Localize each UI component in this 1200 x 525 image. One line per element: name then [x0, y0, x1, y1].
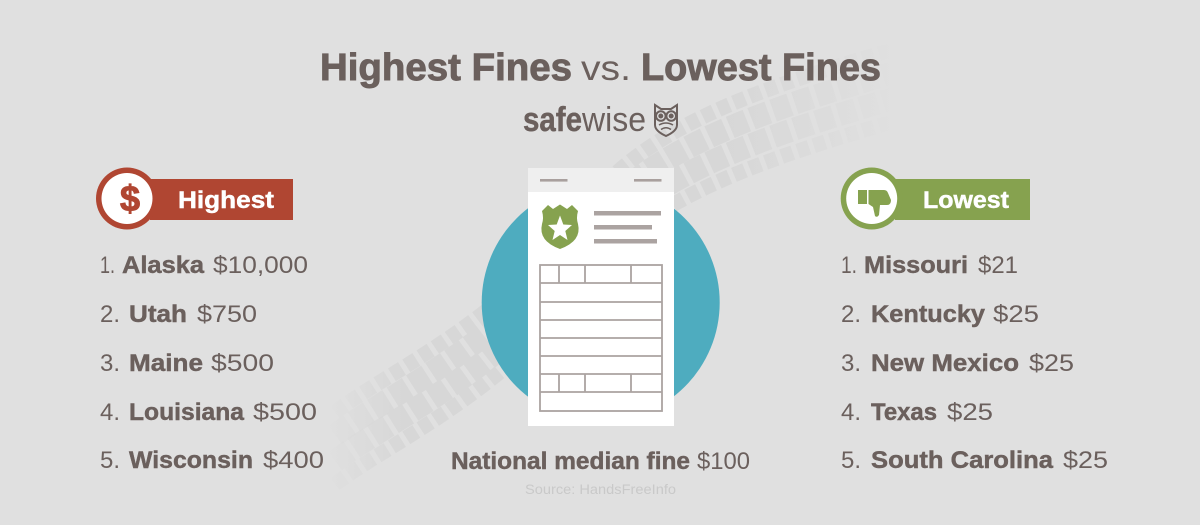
national median fine: National median fine — [451, 448, 690, 475]
list: highest fines: 2. — [100, 301, 120, 328]
source: Source: HandsFreeInfo — [525, 482, 676, 497]
ticket paper — [528, 168, 674, 426]
list: lowest fines: Texas — [871, 399, 937, 426]
list: highest fines: $10,000 — [213, 252, 308, 279]
panel: highest — [96, 168, 324, 474]
list: highest fines: 5. — [100, 447, 120, 474]
national median fine: $100 — [697, 448, 750, 475]
list: highest fines: 3. — [100, 350, 120, 377]
panel: lowest — [841, 168, 1108, 474]
illustration: citation ticket — [482, 168, 720, 426]
list: highest fines — [100, 252, 324, 474]
list: highest fines: Utah — [129, 301, 187, 328]
safewise logo: wise — [581, 101, 646, 139]
list: highest fines: Louisiana — [129, 399, 245, 426]
list: lowest fines: $25 — [1029, 350, 1074, 377]
title: Highest Fines — [320, 47, 572, 89]
badge: lowest: Lowest — [923, 187, 1009, 214]
list: lowest fines: 5. — [841, 447, 861, 474]
badge: lowest — [841, 168, 1030, 230]
list: highest fines: $500 — [211, 350, 274, 377]
list: lowest fines: New Mexico — [871, 350, 1019, 377]
list: highest fines: 1. — [100, 252, 115, 279]
icon: police badge — [541, 204, 579, 249]
list: highest fines: $500 — [253, 399, 317, 426]
list: lowest fines: $25 — [993, 301, 1039, 328]
list: highest fines: $400 — [263, 447, 324, 474]
list: lowest fines: $25 — [947, 399, 993, 426]
badge: highest: Highest — [178, 187, 274, 214]
title — [320, 47, 881, 89]
list: lowest fines: 4. — [841, 399, 861, 426]
list: highest fines: 4. — [100, 399, 120, 426]
icon: thumbs down — [858, 190, 891, 217]
list: highest fines: Wisconsin — [129, 447, 253, 474]
safewise logo — [523, 101, 677, 139]
list: lowest fines: $25 — [1063, 447, 1108, 474]
teal circle — [482, 184, 720, 422]
list: lowest fines: Kentucky — [871, 301, 986, 328]
badge: highest: $ — [120, 178, 140, 219]
title: vs. — [581, 49, 631, 88]
list: lowest fines: 2. — [841, 301, 861, 328]
list: lowest fines: 3. — [841, 350, 861, 377]
title: Lowest Fines — [641, 47, 881, 89]
tire tracks background — [335, 39, 930, 484]
list: lowest fines: 1. — [841, 252, 857, 279]
list: lowest fines: Missouri — [864, 252, 968, 279]
ticket header — [528, 168, 674, 192]
list: highest fines: Alaska — [122, 252, 205, 279]
icon: owl — [655, 105, 677, 136]
safewise logo: safe — [523, 101, 582, 139]
ticket text lines — [594, 211, 661, 244]
badge: highest — [96, 168, 293, 230]
list: highest fines: Maine — [129, 350, 203, 377]
list: lowest fines — [841, 252, 1108, 474]
list: lowest fines: South Carolina — [871, 447, 1054, 474]
ticket form table — [540, 265, 662, 411]
list: lowest fines: $21 — [978, 252, 1018, 279]
list: highest fines: $750 — [197, 301, 257, 328]
